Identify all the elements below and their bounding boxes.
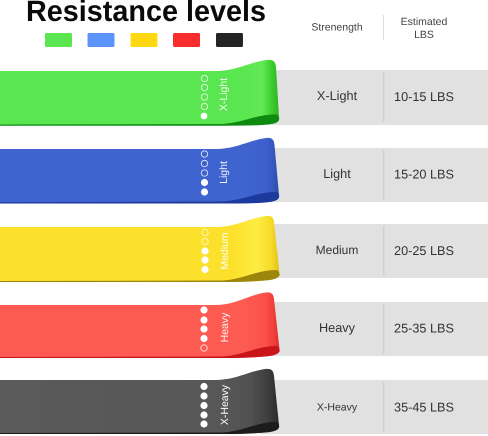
column header: estimated LBS: LBS	[414, 29, 434, 41]
row 2 panel: Light: 15-20 LBS	[394, 168, 454, 182]
column header: strength: Strenength	[311, 22, 363, 34]
blue band: Light	[0, 138, 279, 204]
black band: X-Heavy	[0, 369, 279, 434]
red band: Heavy	[0, 292, 280, 358]
row 3 panel: Medium: 20-25 LBS	[394, 244, 454, 258]
row 4 panel: Heavy: 25-35 LBS	[394, 322, 454, 336]
row 3 panel: Medium	[260, 224, 488, 278]
row 1 panel: X-Light: 10-15 LBS	[394, 90, 454, 104]
colour legend	[45, 33, 243, 47]
column header: estimated LBS	[401, 16, 448, 41]
row 5 panel: X-Heavy: X-Heavy	[317, 402, 358, 414]
yellow band: Medium: Medium	[219, 232, 231, 270]
green band: X-Light	[0, 60, 279, 126]
black band: X-Heavy: X-Heavy	[219, 384, 231, 425]
row 2 panel: Light	[260, 148, 488, 202]
row 1 panel: X-Light: X-Light	[317, 89, 358, 103]
yellow band: Medium	[0, 216, 280, 282]
row 1 panel: X-Light	[260, 70, 488, 125]
red band: Heavy: Heavy	[219, 312, 231, 342]
row 4 panel: Heavy: Heavy	[319, 321, 356, 335]
row 5 panel: X-Heavy	[260, 380, 488, 434]
blue band: Light: Light	[218, 161, 230, 184]
column header: estimated LBS: Estimated	[401, 16, 448, 28]
row 3 panel: Medium: Medium	[316, 243, 358, 257]
row 2 panel: Light: Light	[323, 167, 351, 181]
row 5 panel: X-Heavy: 35-45 LBS	[394, 400, 454, 414]
row 4 panel: Heavy	[260, 302, 488, 356]
green band: X-Light: X-Light	[218, 78, 230, 111]
